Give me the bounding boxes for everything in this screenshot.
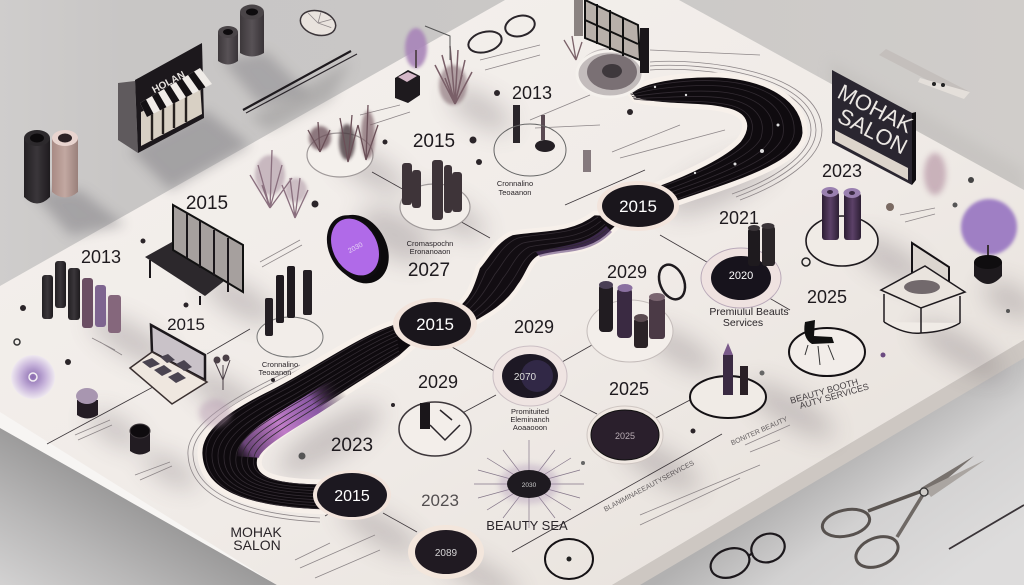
connector lines — [47, 170, 790, 552]
captions: Teoaanon — [259, 368, 291, 377]
node: dark disc 2025: 2025 — [615, 431, 635, 441]
timeline road: middle section — [455, 213, 630, 325]
captions: BLANIMINAEEAUTYSERVICES — [603, 460, 696, 513]
object: purple topped jar — [76, 388, 98, 418]
background: lower right surface — [600, 330, 1024, 585]
captions: Cronnalino — [497, 179, 533, 188]
object: thin tool line bottom right — [949, 505, 1024, 549]
year labels: 2025 — [807, 287, 847, 307]
object: makeup palette — [130, 325, 207, 404]
object: purple tree top — [405, 28, 427, 68]
background: lower left surface — [0, 420, 290, 585]
object: ring with device 2029 — [399, 402, 471, 456]
object: dark jar — [130, 424, 150, 454]
year labels: 2013 — [81, 247, 121, 267]
captions: Eleminanch — [510, 415, 550, 424]
object: bars on disc center right — [587, 281, 673, 362]
object: upper cylinders — [218, 4, 310, 105]
year labels: 2021 — [719, 208, 759, 228]
object: row of cylinders left — [42, 261, 121, 333]
object: dark cube — [395, 70, 420, 103]
captions: Eronanoaon — [410, 247, 450, 256]
icon: miniature storefront: HOLAN — [151, 70, 187, 96]
captions: BEAUTY BOOTH — [789, 377, 859, 406]
timeline road: lower section with purple glow — [188, 322, 420, 522]
year labels: 2013 — [512, 83, 552, 103]
node: 2015 top: 2015 — [619, 197, 657, 216]
object: black and pink cylinders with shadow — [24, 130, 125, 235]
object: purple cylinders 2023 — [806, 187, 878, 266]
year labels: 2023 — [421, 491, 459, 510]
object: thin standing figures — [494, 105, 591, 176]
node: 2089 bottom: 2089 — [435, 548, 458, 559]
sign: Mohak Salon — [832, 70, 917, 185]
ring: dark loop — [654, 261, 690, 303]
captions: MOHAK — [230, 524, 282, 540]
year labels: 2023 — [331, 435, 373, 456]
node: 2089 bottom — [408, 525, 484, 579]
icon: dark sunburst — [474, 440, 584, 528]
object: feathery plants left — [250, 150, 308, 218]
node: disc 2070: 2070 — [514, 372, 537, 383]
object: desk with monitor — [881, 243, 965, 333]
object: tweezers — [243, 51, 357, 130]
node: dark disc 2025 — [587, 406, 663, 464]
object: plants on ring upper center — [307, 105, 378, 177]
icon: miniature storefront — [118, 43, 250, 190]
object: ruler top right — [879, 49, 970, 99]
object: small flower — [214, 355, 230, 390]
captions: Services — [723, 317, 763, 329]
soft shadows on board — [83, 80, 1024, 585]
captions: Cronnalino — [262, 360, 298, 369]
year labels: 2015 — [167, 315, 205, 334]
node: 2015 bottom — [313, 470, 391, 520]
board thickness edge — [0, 405, 277, 585]
year labels: 2029 — [514, 317, 554, 337]
captions: Premiulul Beauts — [709, 306, 789, 318]
node: 2015 middle — [393, 298, 477, 350]
year labels — [81, 83, 862, 510]
year labels: 2023 — [822, 161, 862, 181]
node: 2020 with cylinders — [701, 223, 781, 308]
captions: Teoaanon — [499, 188, 531, 197]
sign: Mohak Salon: MOHAK — [834, 79, 917, 138]
object: purple blur near road — [199, 399, 231, 427]
icon: dark sunburst: 2030 — [522, 482, 537, 489]
icon: purple sunburst — [11, 355, 55, 399]
object: display screen top with disc — [564, 0, 649, 97]
small text lines on board — [75, 45, 935, 578]
icon: eyeglasses — [706, 529, 789, 583]
captions: BONITER BEAUTY — [730, 416, 789, 447]
object: vanity station — [145, 205, 243, 305]
node: 2015 bottom: 2015 — [334, 488, 370, 505]
captions: Cromaspochn — [407, 239, 453, 248]
year labels: 2015 — [186, 193, 228, 214]
captions: AUTY SERVICES — [798, 381, 870, 411]
year labels: 2027 — [408, 260, 450, 281]
icon: glasses on board top — [466, 12, 537, 56]
object: lilac tree in pot — [961, 199, 1017, 284]
object: pink plant — [924, 153, 946, 195]
object: dark plants on ring center — [400, 160, 470, 230]
icon: scissors — [820, 456, 985, 573]
object: compact with purple lens — [316, 203, 400, 295]
object: compact with purple lens: 2030 — [347, 242, 364, 255]
captions: Promituited — [511, 407, 549, 416]
sign: Mohak Salon: SALON — [834, 103, 912, 159]
captions: SALON — [233, 537, 281, 553]
object: round dish — [298, 7, 338, 39]
year labels: 2015 — [413, 131, 455, 152]
node: disc 2070 — [493, 346, 567, 406]
timeline road: upper section — [629, 61, 822, 205]
captions: Aoaaooon — [513, 423, 547, 432]
node: 2020 with cylinders: 2020 — [729, 270, 753, 282]
board lower right edge — [612, 340, 1024, 585]
captions — [230, 179, 870, 553]
object: chair on ring — [789, 320, 865, 376]
year labels: 2029 — [418, 372, 458, 392]
node: 2015 middle: 2015 — [416, 315, 454, 334]
object: lipsticks on ring — [690, 343, 766, 418]
object: mirror frame near plants — [425, 26, 450, 60]
board shadow on right wall — [830, 60, 1024, 200]
year labels: 2025 — [609, 379, 649, 399]
ring: bottom small — [545, 539, 593, 579]
node: 2015 top — [597, 181, 679, 231]
object: brown grass top — [435, 46, 472, 105]
dots — [14, 90, 1010, 465]
year labels: 2029 — [607, 262, 647, 282]
captions: BEAUTY SEA — [486, 518, 568, 533]
object: bars on ring center left — [257, 266, 323, 357]
